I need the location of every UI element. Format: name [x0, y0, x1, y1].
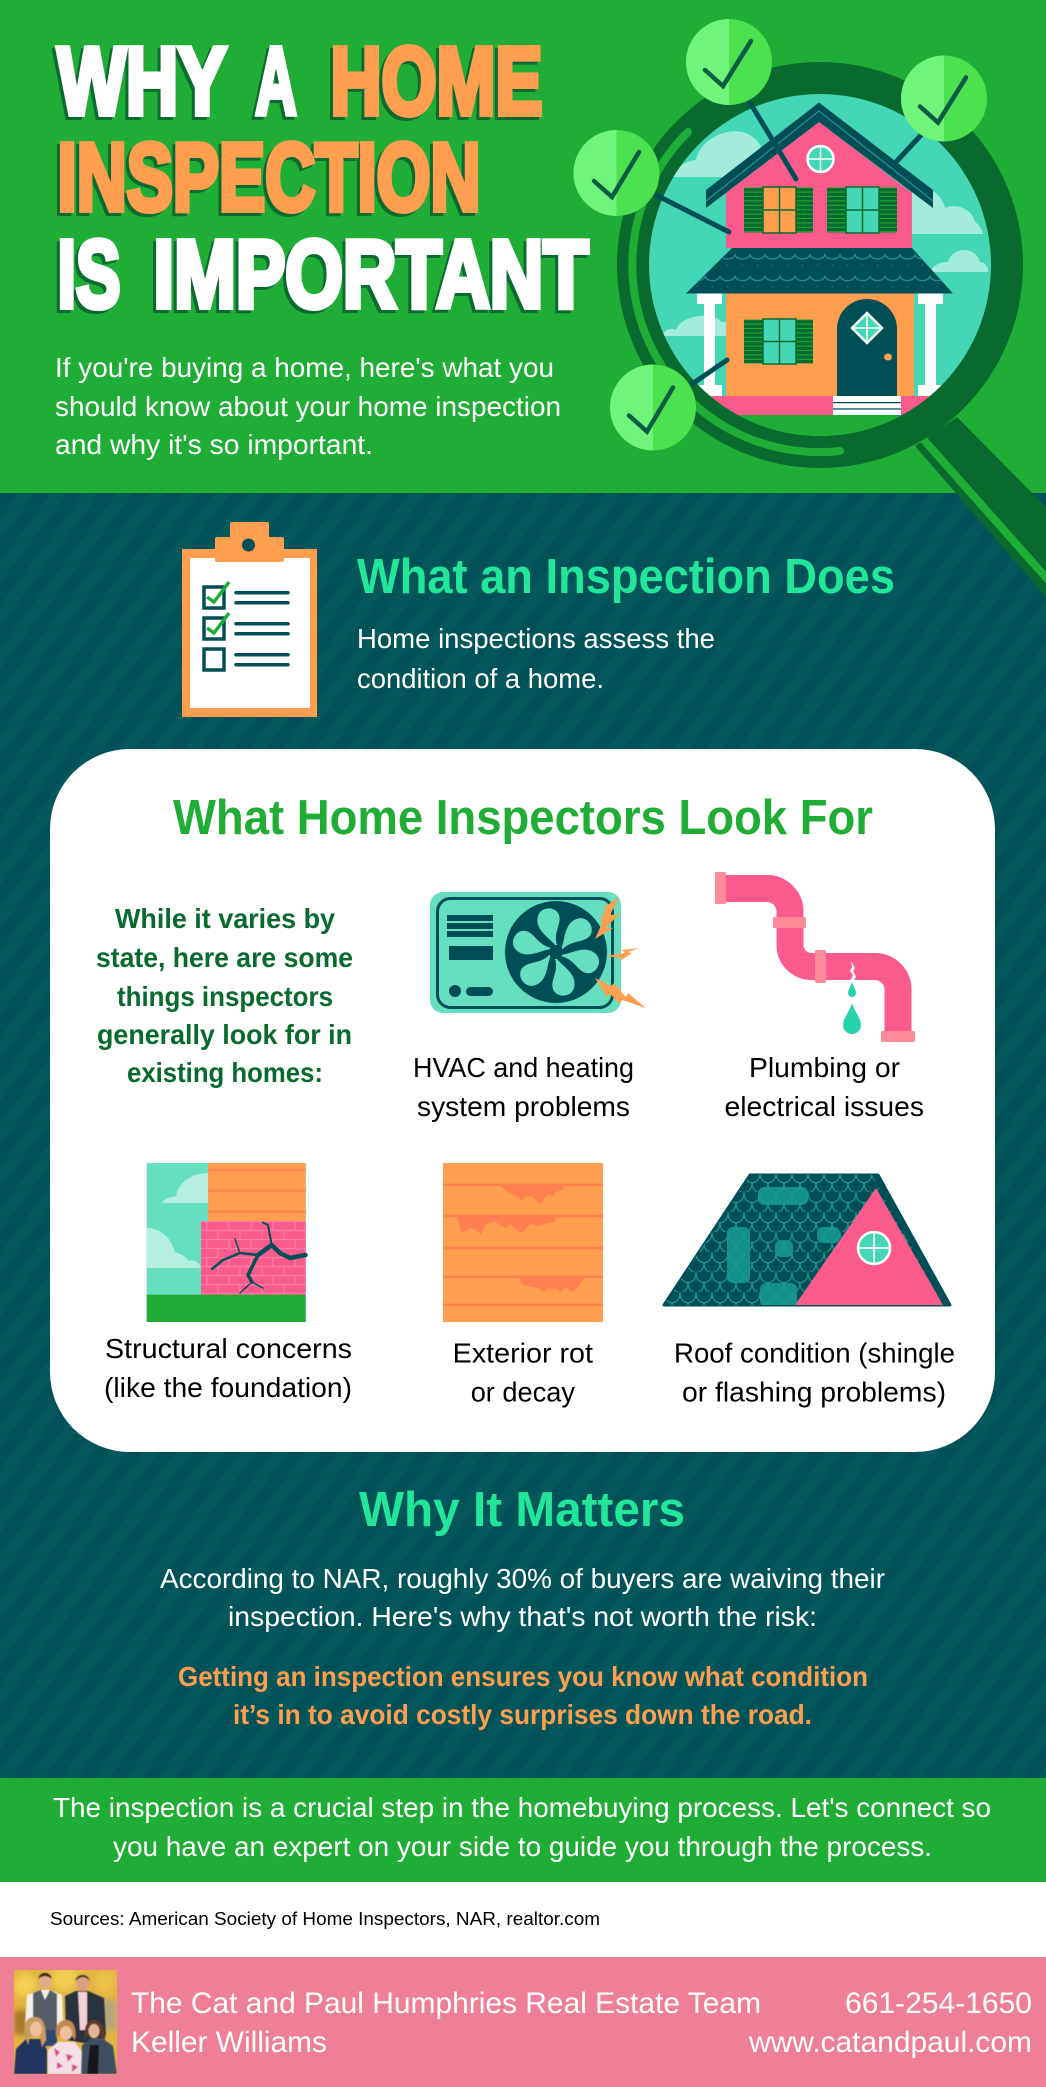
check badge: left	[574, 130, 660, 216]
team name: The Cat and Paul Humphries Real Estate Team	[131, 1987, 761, 2020]
upper wall	[726, 122, 912, 248]
title	[58, 28, 588, 328]
roof label: Roof condition (shingle	[674, 1338, 955, 1369]
ring	[617, 62, 1023, 468]
title: INSPECTION	[58, 124, 480, 231]
intro text: things inspectors	[117, 981, 333, 1012]
rot label: or decay	[471, 1377, 575, 1408]
intro text: generally look for in	[97, 1019, 352, 1050]
icon: shingled roof	[660, 1170, 955, 1310]
rot label: Exterior rot	[453, 1338, 593, 1369]
hvac label: HVAC and heating	[413, 1052, 634, 1083]
icon: clipboard	[182, 522, 317, 717]
icon: hvac unit	[430, 892, 646, 1013]
call to action banner: you have an expert on your side to guide you through the process.	[113, 1831, 932, 1862]
check badge: right	[901, 56, 987, 142]
clouds	[662, 131, 988, 336]
footer	[0, 1957, 1046, 2087]
section: what an inspection does	[357, 550, 895, 694]
door	[837, 299, 897, 396]
header background	[0, 0, 1046, 493]
intro text: and why it's so important.	[55, 429, 373, 460]
ring highlight	[632, 132, 840, 452]
round window	[808, 146, 834, 172]
hvac label	[413, 1052, 634, 1122]
body: According to NAR, roughly 30% of buyers are waiving their	[160, 1563, 885, 1594]
foundation	[710, 396, 930, 415]
pipe label: electrical issues	[724, 1091, 924, 1122]
door window	[852, 313, 882, 343]
hvac label: system problems	[417, 1091, 630, 1122]
section: why it matters	[160, 1483, 885, 1730]
team name: 661-254-1650	[845, 1987, 1032, 2020]
team photo	[14, 1965, 117, 2074]
connector lines	[656, 101, 921, 384]
description: condition of a home.	[357, 663, 604, 694]
highlight	[178, 1661, 868, 1730]
title: IMPORTANT	[154, 221, 588, 328]
structural label: Structural concerns	[105, 1333, 352, 1364]
columns	[697, 293, 943, 396]
handle	[915, 417, 1046, 597]
body: inspection. Here's why that's not worth the risk:	[228, 1601, 817, 1632]
lower window	[744, 319, 813, 364]
structural label: (like the foundation)	[104, 1372, 352, 1403]
intro text: If you're buying a home, here's what you	[55, 352, 554, 383]
sources: Sources: American Society of Home Inspectors, NAR, realtor.com	[50, 1908, 600, 1929]
team name	[131, 1987, 1032, 2059]
description	[357, 623, 715, 694]
intro text	[96, 903, 353, 1088]
description: Home inspections assess the	[357, 623, 715, 654]
check badge: bottom	[610, 364, 696, 450]
structural label	[104, 1333, 352, 1403]
intro text: should know about your home inspection	[55, 391, 561, 422]
title: A	[256, 28, 296, 135]
intro text: While it varies by	[115, 903, 335, 934]
heading: Why It Matters	[359, 1483, 685, 1537]
house	[686, 102, 953, 415]
magnifying glass with house	[574, 19, 1046, 597]
body	[160, 1563, 885, 1632]
upper left window	[744, 187, 813, 233]
rot label	[453, 1338, 593, 1408]
icon: cracked foundation	[147, 1163, 306, 1322]
call to action banner: The inspection is a crucial step in the homebuying process. Let's connect so	[53, 1792, 991, 1823]
highlight: it’s in to avoid costly surprises down the road.	[233, 1699, 812, 1730]
team name: www.catandpaul.com	[748, 2026, 1032, 2059]
lower wall	[726, 293, 914, 396]
roof label: or flashing problems)	[682, 1377, 946, 1408]
pipe label: Plumbing or	[749, 1052, 900, 1083]
intro text: state, here are some	[96, 942, 353, 973]
team name: Keller Williams	[131, 2026, 327, 2059]
ground in lens	[738, 415, 902, 436]
sources	[0, 1882, 1046, 1957]
heading: What an Inspection Does	[357, 550, 895, 604]
icon: leaking pipe	[715, 872, 915, 1042]
icon: rotting siding	[443, 1163, 603, 1322]
panel heading: What Home Inspectors Look For	[173, 791, 873, 845]
upper roof	[706, 102, 933, 208]
title: IS	[58, 221, 120, 328]
highlight: Getting an inspection ensures you know what condition	[178, 1661, 868, 1692]
call to action banner	[0, 1778, 1046, 1882]
title: HOME	[330, 28, 542, 135]
door knob	[884, 354, 892, 360]
steps	[833, 396, 901, 415]
dark striped background	[0, 493, 1046, 1778]
lens	[649, 94, 991, 436]
intro text: existing homes:	[127, 1057, 323, 1088]
pipe label	[724, 1052, 924, 1122]
intro text	[55, 352, 561, 460]
check badge: top	[686, 19, 772, 105]
lower roof	[686, 248, 953, 294]
panel: what home inspectors look for	[50, 749, 995, 1452]
upper right window	[827, 187, 897, 233]
title: WHY	[58, 28, 226, 135]
roof label	[674, 1338, 955, 1408]
